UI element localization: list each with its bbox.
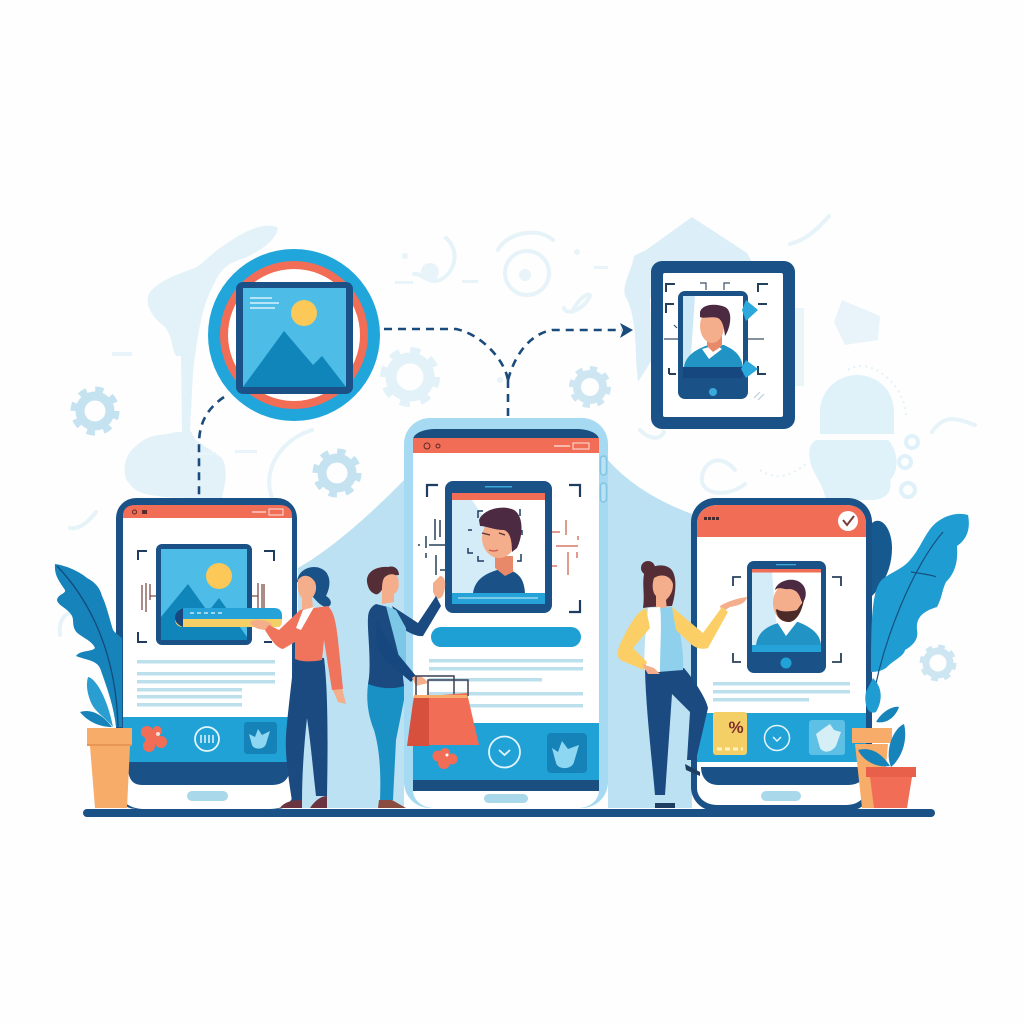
- portrait: [452, 486, 545, 604]
- tablet frame: [651, 261, 795, 429]
- flower icon: [432, 748, 458, 769]
- phone screen: [697, 505, 866, 805]
- circle icon: [489, 736, 520, 768]
- shoes: [280, 796, 327, 808]
- scan brackets: [733, 577, 841, 662]
- big leaf: [871, 514, 969, 672]
- circle icon: [195, 727, 219, 751]
- dark leaf behind phone: [872, 521, 892, 596]
- left phone: [116, 498, 297, 809]
- coral pot leaves: [858, 724, 905, 767]
- pale cycle icons: [60, 216, 975, 635]
- image frame: [156, 544, 252, 645]
- red header: [697, 505, 866, 537]
- phone light frame: [404, 418, 608, 808]
- leaf icon tile: [809, 720, 845, 755]
- floor line: [83, 809, 935, 817]
- raised hand: [433, 576, 445, 599]
- home button: [761, 791, 801, 801]
- stem leaf small: [876, 707, 899, 722]
- hand: [720, 597, 747, 612]
- inner phone: [747, 561, 826, 673]
- home button: [484, 794, 528, 803]
- pale blob: left tree: [125, 226, 278, 498]
- dashed path: circle to junction: [384, 329, 508, 380]
- source image badge: [208, 249, 380, 421]
- arrowhead: to middle phone: [503, 421, 513, 429]
- hand on bag: [412, 676, 428, 686]
- picture: [243, 288, 346, 387]
- hair: [367, 566, 399, 594]
- scan ticks: [142, 583, 264, 612]
- card being held: [175, 608, 282, 627]
- gear: centre right: [572, 369, 608, 405]
- stem leaf: [865, 678, 881, 713]
- dark bar: [413, 780, 599, 791]
- leaf icon tile: [244, 722, 277, 754]
- scan ticks left: [418, 519, 447, 575]
- hand: [250, 620, 272, 630]
- gear: centre left: [384, 351, 436, 403]
- phone body: [116, 498, 297, 809]
- leaf icon tile: [547, 733, 587, 773]
- bottom icon panel: [123, 717, 292, 762]
- image frame: [445, 481, 552, 613]
- pants: [645, 668, 708, 795]
- coupon card: %: [728, 718, 744, 737]
- face: [298, 576, 316, 611]
- bottom icon panel: [697, 713, 866, 762]
- big leaf: [55, 564, 122, 727]
- dark bar: [701, 767, 866, 785]
- scan brackets: [427, 485, 580, 612]
- shoe: [378, 800, 406, 808]
- red header: [413, 438, 599, 453]
- top: [658, 607, 683, 672]
- orange pot: [87, 728, 132, 808]
- action button: [431, 627, 581, 647]
- top result tablet: [651, 261, 795, 429]
- orange pot: [852, 728, 892, 808]
- arrowhead: to tablet: [620, 323, 633, 338]
- shirt: [386, 606, 406, 672]
- free hand: [332, 688, 346, 704]
- gear cluster: robot: [899, 436, 918, 497]
- portrait: [752, 564, 821, 668]
- middle phone: [404, 418, 608, 808]
- lower dark bar: [128, 767, 290, 785]
- scan brackets: [138, 551, 274, 642]
- lower leaf: [87, 677, 113, 727]
- woman in yellow cardigan: [618, 561, 747, 808]
- pale house behind top tablet: [624, 217, 752, 382]
- raised arm: [392, 596, 441, 636]
- text lines: [713, 682, 850, 702]
- yellow sleeve left: [618, 608, 650, 670]
- bun and hair: [641, 561, 675, 608]
- dashed path: junction to middle phone: [507, 380, 509, 424]
- jacket: [368, 604, 404, 688]
- pale dotted ring: [760, 366, 906, 476]
- pale dots and dashes: [112, 249, 880, 455]
- background pale shapes: [60, 216, 975, 679]
- pants: [367, 684, 404, 800]
- tablet white screen: [663, 273, 783, 417]
- phone lower white: [120, 767, 294, 809]
- coral pot: [866, 767, 916, 808]
- inner phone photo: [683, 296, 743, 396]
- face: [382, 574, 399, 604]
- inner phone: [678, 291, 748, 399]
- face: [653, 576, 673, 610]
- gear: lower left: [316, 452, 358, 494]
- left plant: [55, 564, 132, 808]
- scan brackets: [666, 284, 768, 374]
- side buttons: [600, 456, 606, 502]
- picture: [161, 549, 247, 640]
- home button: [187, 791, 228, 801]
- dark top bar: [413, 429, 599, 440]
- gear: upper left: [74, 390, 116, 432]
- circle icon: [764, 726, 790, 750]
- man with shopping bag: [367, 566, 479, 808]
- image frame: [236, 282, 353, 394]
- flower icon: [141, 726, 167, 752]
- glare strokes: [754, 392, 764, 400]
- leaf ribs: [872, 532, 943, 705]
- dashed path: junction to tablet: [508, 330, 622, 380]
- bottom icon panel: [413, 723, 599, 780]
- badge rings: [208, 249, 380, 421]
- woman with card: [250, 567, 346, 808]
- shoes: [655, 764, 700, 808]
- side diamonds: [741, 300, 758, 378]
- dashed connectors: [199, 329, 622, 498]
- jacket: [265, 606, 343, 690]
- phone screen: [123, 518, 292, 718]
- pale strip right of tablet: [795, 308, 804, 386]
- header bar: [123, 505, 292, 518]
- hand on hip: [642, 664, 660, 674]
- shirt: [296, 607, 314, 630]
- pants: [286, 658, 328, 801]
- yellow sleeve right: [672, 607, 728, 649]
- phone screen: [413, 429, 599, 808]
- scan ticks right: [552, 520, 578, 575]
- white cardigan panel: [644, 607, 661, 672]
- gear: far right: [922, 647, 954, 679]
- dashed path: circle to left phone: [199, 397, 224, 498]
- lower arm: [376, 620, 416, 682]
- small leaf: [80, 711, 112, 727]
- leaf rib: [57, 566, 118, 727]
- text lines: [429, 659, 583, 708]
- right plant: [852, 514, 969, 808]
- central light blue hill: [298, 460, 692, 808]
- scan ticks: [664, 283, 764, 339]
- phone body: [691, 498, 872, 811]
- right phone: [691, 498, 892, 811]
- text lines: [137, 660, 275, 706]
- pale robot head: [809, 375, 897, 500]
- hair: [297, 567, 331, 607]
- coupon card: [713, 712, 747, 755]
- shopping bag: [407, 676, 479, 746]
